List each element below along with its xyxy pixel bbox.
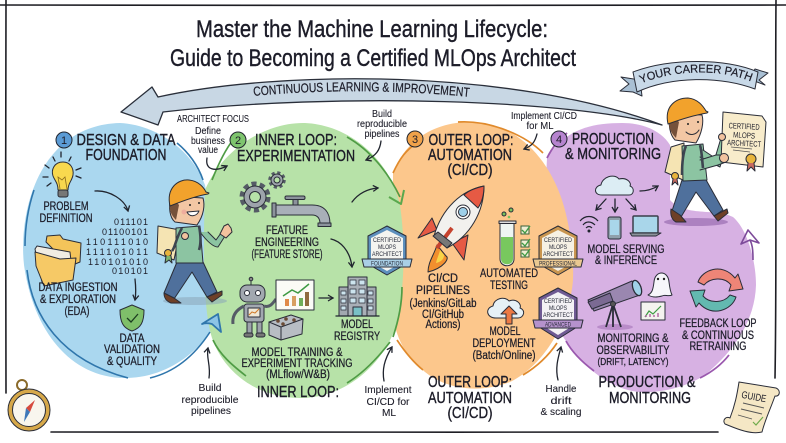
label: problem definition: PROBLEM — [44, 201, 88, 213]
heading: step 2: INNER LOOP: — [255, 132, 337, 149]
ribbon: your career path: YOUR CAREER PATH — [638, 64, 753, 82]
label: feature engineering — [252, 225, 323, 261]
badge: professional: MLOPS — [549, 244, 568, 251]
binary data stream: 111101011 — [86, 247, 148, 257]
icon: guide scroll: GUIDE — [740, 390, 767, 405]
label: inner loop footer: INNER LOOP: — [257, 384, 339, 401]
heading: step 4: PRODUCTION — [572, 131, 654, 148]
certificate — [721, 112, 766, 171]
label: model deployment: DEPLOYMENT — [472, 338, 536, 350]
panel: outer loop background — [392, 122, 573, 389]
title — [170, 16, 576, 72]
annotation: implement ci/cd bottom: Implement — [364, 384, 412, 396]
heading: step 3: 3 — [412, 134, 418, 146]
panel: inner loop background — [204, 123, 404, 398]
label: model registry: REGISTRY — [334, 331, 380, 343]
binary data stream: 01100101 — [102, 227, 148, 237]
label: model serving and inference: MODEL SERVING — [588, 244, 665, 256]
label: model training and experiment tracking: (MLflow/W&B) — [266, 369, 330, 381]
icon: faucet — [272, 196, 331, 226]
arrow: green flow into outer loop — [389, 190, 404, 204]
label: feedback loop and continuous retraining: RETRAINING — [690, 341, 747, 353]
label: outer loop footer: (CI/CD) — [448, 405, 492, 422]
badge: foundation: CERTIFIED — [373, 237, 401, 244]
label: model training and experiment tracking: EXPERIMENT TRACKING — [242, 358, 353, 370]
label: monitoring and observability: OBSERVABILITY — [596, 345, 670, 357]
annotation: architect focus: ARCHITECT FOCUS — [177, 113, 249, 125]
arrow: to binary data — [95, 191, 128, 211]
binary data stream: 011101 — [114, 217, 148, 227]
label: feedback loop and continuous retraining — [680, 318, 757, 353]
arrows: feature flow — [331, 188, 378, 267]
label: problem definition — [40, 201, 92, 225]
label: outer loop footer: AUTOMATION — [428, 390, 512, 407]
label: data ingestion and exploration — [38, 282, 118, 318]
label: data ingestion and exploration: & EXPLORATION — [40, 294, 116, 306]
icon: light bulb — [43, 152, 81, 197]
annotation: build reproducible pipelines bottom: Build — [198, 382, 222, 394]
icon: robot — [233, 277, 276, 337]
label: ci/cd pipelines — [410, 273, 476, 331]
label: feedback loop and continuous retraining: & CONTINUOUS — [682, 330, 754, 342]
arrow: continuous learning and improvement — [120, 78, 663, 126]
annotation: architect focus: business — [191, 135, 225, 147]
label: model deployment — [472, 326, 536, 362]
arrow: to data validation — [134, 279, 137, 300]
certificate: MLOPS — [733, 130, 755, 141]
panel: production and monitoring background — [545, 123, 756, 392]
label: model training and experiment tracking: MODEL TRAINING & — [252, 347, 343, 359]
badge: advanced: ADVANCED — [545, 322, 572, 328]
label: monitoring and observability: MONITORING & — [598, 333, 669, 345]
annotation: build reproducible pipelines bottom — [182, 348, 239, 417]
icon: monitoring chart — [641, 302, 665, 320]
annotation: build reproducible pipelines bottom: reproducible — [182, 394, 239, 406]
badge: advanced — [533, 288, 583, 339]
badge: advanced: CERTIFIED — [544, 298, 572, 305]
heading: step 3: (CI/CD) — [448, 162, 492, 179]
annotation: implement ci/cd bottom: ML — [382, 407, 396, 419]
annotation: implement ci/cd bottom: CI/CD for — [366, 396, 410, 408]
label: ci/cd pipelines: CI/GitHub — [422, 309, 464, 321]
icon: rocket — [418, 186, 484, 272]
heading: step 1: DESIGN & DATA — [76, 132, 176, 149]
label: monitoring and observability: (DRIFT, LATENCY) — [598, 357, 668, 368]
icon: folders — [35, 235, 81, 286]
binary data stream: 010101 — [112, 266, 148, 276]
heading: step 2: EXPERIMENTATION — [237, 148, 355, 165]
label: model serving and inference: & INFERENCE — [595, 255, 657, 267]
label: ci/cd pipelines: Actions) — [426, 319, 461, 331]
icon: compass — [8, 380, 50, 431]
label: ci/cd pipelines: PIPELINES — [416, 285, 470, 297]
annotation: build reproducible pipelines top: reproducible — [357, 118, 407, 130]
label: monitoring and observability — [596, 333, 670, 368]
label: problem definition: DEFINITION — [40, 213, 92, 225]
binary data stream: 110111010 — [86, 237, 148, 247]
annotation: build reproducible pipelines top — [357, 108, 407, 160]
label: production and monitoring footer — [598, 374, 696, 407]
label: feature engineering: FEATURE — [266, 225, 308, 237]
panel: design and data foundation background — [23, 123, 225, 378]
title: Guide to Becoming a Certified MLOps Architect — [170, 45, 576, 72]
icon: ghost — [648, 273, 672, 297]
label: production and monitoring footer: MONITORING — [609, 390, 691, 407]
title: Master the Machine Learning Lifecycle: — [196, 16, 548, 43]
label: automated testing — [480, 268, 538, 292]
annotation: implement ci/cd top: Implement CI/CD — [511, 110, 577, 122]
label: data validation and quality — [104, 333, 160, 368]
label: feature engineering: ENGINEERING — [255, 237, 319, 249]
annotation: implement ci/cd bottom — [364, 347, 412, 419]
label: data validation and quality: DATA — [120, 333, 145, 345]
badge: foundation: FOUNDATION — [371, 262, 403, 268]
label: ci/cd pipelines: CI/CD — [428, 273, 458, 285]
label: production and monitoring footer: PRODUCTION & — [598, 374, 696, 391]
badge: advanced: MLOPS — [549, 305, 568, 312]
annotation: build reproducible pipelines top: pipelines — [364, 128, 400, 140]
arrow: purple flow upward — [741, 230, 759, 260]
icon: feedback cycle arrows — [690, 269, 743, 311]
annotation: build reproducible pipelines bottom: pipelines — [191, 405, 231, 417]
label: feedback loop and continuous retraining: FEEDBACK LOOP — [680, 318, 757, 330]
annotation: handle drift and scaling — [540, 347, 582, 418]
label: automated testing: TESTING — [490, 280, 528, 292]
label: data ingestion and exploration: (EDA) — [64, 306, 90, 318]
icon: test tube with checks — [499, 208, 530, 266]
label: model deployment: (Batch/Online) — [472, 350, 536, 362]
label: outer loop footer — [428, 374, 512, 422]
label: model registry: MODEL — [341, 319, 373, 331]
heading: step 2: 2 — [235, 135, 241, 147]
annotation: handle drift and scaling: & scaling — [540, 406, 582, 418]
arrow: to registry — [319, 297, 333, 299]
badge: professional: CERTIFIED — [544, 237, 572, 244]
arrow: blue flow into inner loop — [202, 314, 221, 332]
heading: step 3: OUTER LOOP: — [428, 132, 514, 149]
icon: guide scroll — [724, 382, 779, 433]
heading: step 4 — [551, 131, 661, 163]
annotation: build reproducible pipelines top: Build — [372, 108, 392, 120]
heading: step 1 — [56, 132, 176, 164]
heading: step 4: 4 — [556, 134, 562, 146]
badge: foundation: ARCHITECT — [372, 251, 402, 258]
heading: step 1: 1 — [61, 135, 67, 147]
heading: step 4: & MONITORING — [565, 146, 661, 163]
label: ci/cd pipelines: (Jenkins/GitLab — [410, 298, 476, 310]
label: feature engineering: (FEATURE STORE) — [252, 249, 323, 261]
icon: serving cloud with devices — [580, 176, 661, 239]
heading: step 1: FOUNDATION — [86, 147, 166, 164]
label: data validation and quality: VALIDATION — [104, 344, 160, 356]
annotation: implement ci/cd top — [511, 110, 577, 149]
binary data stream — [86, 217, 148, 276]
heading: step 3 — [407, 131, 514, 179]
icon: gpu hardware — [269, 315, 303, 340]
heading: step 3: AUTOMATION — [428, 147, 512, 164]
badge: foundation — [362, 226, 412, 275]
label: automated testing: AUTOMATED — [480, 268, 538, 280]
icon: cloud upload — [488, 298, 524, 324]
icon: telescope — [588, 279, 643, 330]
label: model training and experiment tracking — [242, 347, 353, 381]
label: model serving and inference — [588, 244, 665, 267]
certificate: CERTIFIED — [728, 121, 760, 132]
certificate: ARCHITECT — [727, 138, 761, 149]
icon: training chart board — [276, 280, 314, 310]
icon: validation shield — [120, 305, 144, 331]
annotation: architect focus: Define — [195, 125, 221, 137]
label: data ingestion and exploration: DATA INGESTION — [38, 282, 118, 294]
annotation: architect focus — [177, 113, 249, 169]
icon: gears — [242, 173, 284, 210]
icon: model registry building — [336, 277, 379, 316]
annotation: handle drift and scaling: drift — [550, 395, 572, 407]
badge: advanced: ARCHITECT — [543, 312, 573, 319]
badge: professional: PROFESSIONAL — [539, 262, 578, 268]
character: architect walking with backpack — [157, 180, 232, 305]
heading: step 2 — [230, 132, 355, 165]
badge: professional — [533, 226, 583, 275]
arrow: continuous learning and improvement: CONTINUOUS LEARNING & IMPROVEMENT — [254, 82, 470, 97]
label: data validation and quality: & QUALITY — [107, 356, 157, 368]
label: model deployment: MODEL — [490, 326, 521, 338]
ribbon: your career path — [620, 61, 768, 96]
character: architect holding certificate — [664, 98, 766, 226]
annotation: architect focus: value — [198, 144, 218, 156]
label: model registry — [334, 319, 380, 343]
badge: foundation: MLOPS — [378, 244, 397, 251]
annotation: implement ci/cd top: for ML — [526, 120, 554, 132]
badge: professional: ARCHITECT — [543, 251, 573, 258]
annotation: handle drift and scaling: Handle — [546, 383, 577, 395]
binary data stream: 110101010 — [88, 257, 148, 267]
label: outer loop footer: OUTER LOOP: — [428, 374, 512, 391]
